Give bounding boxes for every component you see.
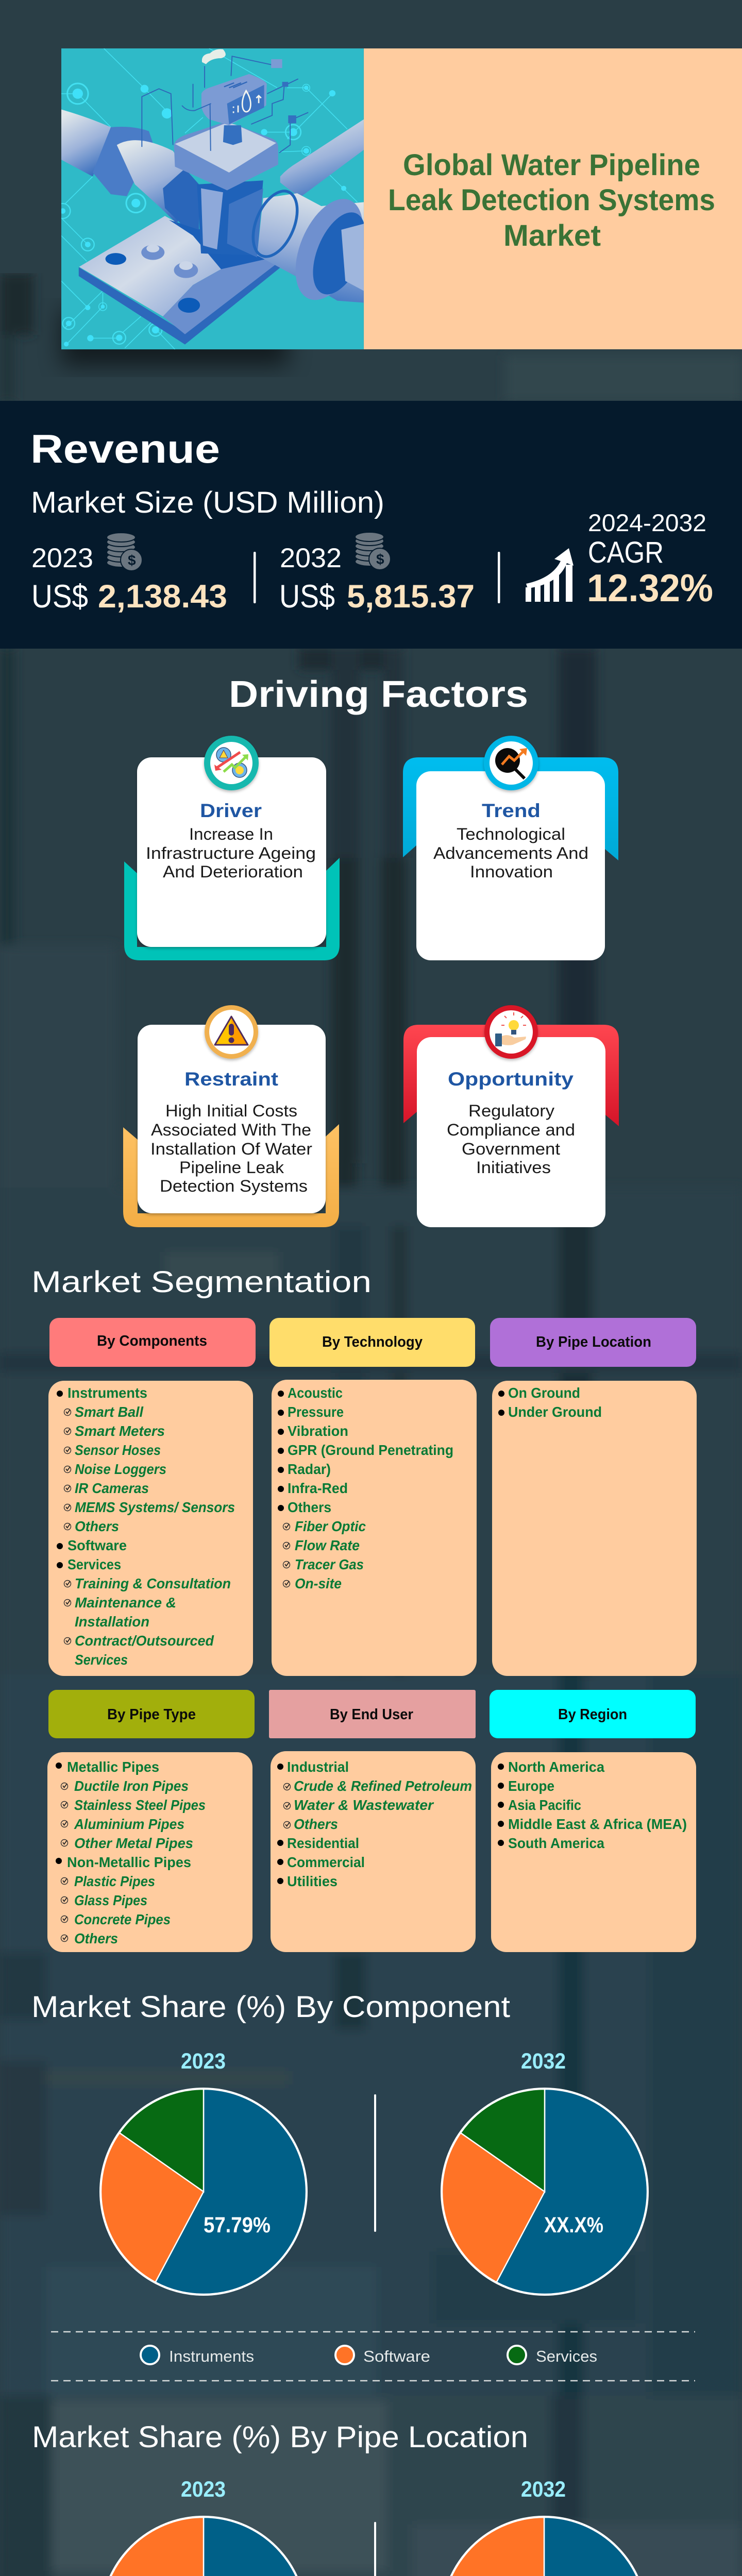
2032 revenue: US$ xyxy=(279,579,335,615)
2023 revenue: US$ xyxy=(31,579,88,615)
icon: coins 2032: $ xyxy=(376,551,384,567)
opportunity text xyxy=(447,1101,575,1177)
icon: coins 2032 xyxy=(355,532,391,570)
panel: restraint xyxy=(123,1005,339,1227)
CAGR: 12.32% xyxy=(587,566,713,609)
segment header: by components xyxy=(49,1318,256,1367)
title text: Leak Detection Systems xyxy=(388,183,715,217)
segment header: by pipe type xyxy=(48,1690,255,1738)
panel: components list: Services xyxy=(75,1652,128,1668)
panel: pipe type list: Ductile Iron Pipes xyxy=(74,1778,189,1794)
panel: components list: Services xyxy=(68,1556,121,1572)
segment header: by technology: By Technology xyxy=(322,1334,423,1350)
panel: technology list: Tracer Gas xyxy=(295,1556,364,1572)
pie chart: component 2023 xyxy=(101,2049,306,2294)
icon: driver xyxy=(204,736,259,790)
panel: pipe type list: Others xyxy=(74,1930,118,1946)
panel: pipe type list: Stainless Steel Pipes xyxy=(74,1797,206,1813)
panel: trend xyxy=(403,736,618,960)
CAGR xyxy=(587,509,713,609)
panel: components list: Maintenance & xyxy=(75,1595,176,1611)
opportunity title: Opportunity xyxy=(448,1069,574,1090)
panel: pipe location list xyxy=(492,1381,697,1676)
legend: component: Services xyxy=(536,2347,597,2365)
driver text xyxy=(146,825,316,881)
trend text: Innovation xyxy=(470,862,553,881)
panel: pipe location list: On Ground xyxy=(508,1385,580,1401)
divider xyxy=(254,552,256,603)
panel: components list: Software xyxy=(68,1537,127,1553)
pie chart: component 2023: 57.79% xyxy=(204,2213,271,2238)
heading: market share by component: Market Share (%) By Component xyxy=(31,1990,510,2024)
2023 revenue xyxy=(31,543,227,615)
title panel xyxy=(364,48,742,349)
panel: end user list: Crude & Refined Petroleum xyxy=(294,1778,472,1794)
panel: opportunity xyxy=(403,1005,619,1227)
segment header: by end user: By End User xyxy=(330,1706,413,1723)
panel: pipe type list: Concrete Pipes xyxy=(74,1911,171,1927)
illustration: water pipeline with leak sensor xyxy=(55,48,377,349)
market size subheading: Market Size (USD Million) xyxy=(31,486,384,519)
panel: pipe location list: Under Ground xyxy=(508,1404,602,1420)
panel: pipe type list: Glass Pipes xyxy=(74,1892,147,1908)
trend text xyxy=(433,825,588,881)
panel: pipe type list: Plastic Pipes xyxy=(74,1873,155,1889)
panel: technology list: GPR (Ground Penetrating xyxy=(288,1442,453,1458)
panel: pipe type list: Other Metal Pipes xyxy=(74,1835,193,1851)
panel: components list xyxy=(48,1381,253,1676)
pie chart: component 2023: 2023 xyxy=(181,2049,226,2074)
panel: pipe type list: Metallic Pipes xyxy=(67,1759,159,1775)
segment header: by technology xyxy=(269,1318,475,1367)
panel: components list: MEMS Systems/ Sensors xyxy=(75,1499,235,1515)
panel: components list: Noise Loggers xyxy=(75,1461,166,1477)
icon: trend xyxy=(484,736,538,790)
opportunity text: Government xyxy=(462,1140,560,1158)
CAGR: CAGR xyxy=(588,536,664,569)
revenue heading: Revenue xyxy=(30,426,220,471)
driver title: Driver xyxy=(200,800,262,821)
restraint title: Restraint xyxy=(184,1069,278,1090)
segment header: by pipe type: By Pipe Type xyxy=(107,1706,196,1723)
CAGR: 2024-2032 xyxy=(588,509,706,536)
icon: opportunity xyxy=(484,1005,538,1059)
opportunity text: Initiatives xyxy=(476,1158,551,1177)
panel: end user list: Industrial xyxy=(287,1759,349,1775)
panel: end user list: Water & Wastewater xyxy=(294,1797,434,1813)
panel: end user list: Residential xyxy=(287,1835,359,1851)
panel: components list: Instruments xyxy=(68,1385,147,1401)
restraint text: Installation Of Water xyxy=(150,1140,312,1158)
divider xyxy=(374,2094,376,2232)
segment header: by region xyxy=(490,1690,696,1738)
divider xyxy=(374,2522,376,2576)
panel: end user list: Utilities xyxy=(287,1873,338,1889)
legend: component: Instruments xyxy=(169,2347,254,2365)
segment header: by pipe location: By Pipe Location xyxy=(536,1334,651,1350)
driving factors heading: Driving Factors xyxy=(229,674,528,715)
panel: technology list: Acoustic xyxy=(288,1385,343,1401)
panel: region list: North America xyxy=(508,1759,604,1775)
restraint text: Detection Systems xyxy=(160,1177,308,1195)
restraint text: Pipeline Leak xyxy=(179,1158,284,1177)
pie chart: component 2032: XX.X% xyxy=(544,2213,603,2238)
2032 revenue: 2032 xyxy=(280,543,342,573)
heading: market share by pipe location: Market Share (%) By Pipe Location xyxy=(32,2420,528,2454)
trend text: Advancements And xyxy=(433,844,588,862)
panel: region list: Middle East & Africa (MEA) xyxy=(508,1816,687,1832)
restraint text: High Initial Costs xyxy=(165,1101,297,1120)
opportunity text: Compliance and xyxy=(447,1121,575,1139)
panel: components list: Smart Ball xyxy=(75,1404,144,1420)
2032 revenue: 5,815.37 xyxy=(347,579,475,615)
panel: components list: Sensor Hoses xyxy=(75,1442,161,1458)
panel: region list xyxy=(491,1752,696,1952)
panel: driver xyxy=(124,736,340,960)
2023 revenue: 2023 xyxy=(31,543,93,573)
title text xyxy=(388,148,715,252)
panel: technology list: Others xyxy=(288,1499,331,1515)
panel: technology list: Fiber Optic xyxy=(295,1518,366,1534)
panel: region list: South America xyxy=(508,1835,604,1851)
panel: technology list: On-site xyxy=(295,1575,342,1591)
header banner xyxy=(55,48,742,349)
driver text: Infrastructure Ageing xyxy=(146,844,316,862)
divider xyxy=(498,552,500,603)
2032 revenue xyxy=(279,543,475,615)
segment header: by components: By Components xyxy=(97,1333,207,1349)
panel: technology list xyxy=(272,1380,477,1676)
title text: Market xyxy=(503,219,601,252)
panel: pipe type list xyxy=(47,1752,252,1952)
legend: component xyxy=(141,2346,597,2365)
legend: component: Software xyxy=(363,2347,430,2365)
panel: technology list: Infra-Red xyxy=(288,1480,348,1496)
segment header: by region: By Region xyxy=(558,1706,627,1723)
panel: components list: Contract/Outsourced xyxy=(75,1633,214,1649)
panel: technology list: Radar) xyxy=(288,1461,331,1477)
panel: components list: Others xyxy=(75,1518,119,1534)
panel: pipe type list: Aluminium Pipes xyxy=(74,1816,184,1832)
panel: end user list xyxy=(271,1751,476,1952)
driver text: Increase In xyxy=(189,825,273,843)
panel: components list: IR Cameras xyxy=(75,1480,149,1496)
icon: coins 2023 xyxy=(107,533,142,571)
panel: technology list: Pressure xyxy=(288,1404,344,1420)
segment header: by pipe location xyxy=(490,1318,696,1367)
panel: components list: Training & Consultation xyxy=(75,1575,231,1591)
icon: coins 2023: $ xyxy=(128,552,136,568)
panel: end user list: Commercial xyxy=(287,1854,365,1870)
restraint text xyxy=(150,1101,312,1195)
panel: components list: Smart Meters xyxy=(75,1423,165,1439)
icon: restraint xyxy=(205,1005,258,1059)
2023 revenue: 2,138.43 xyxy=(98,579,227,615)
pie chart: pipe location 2023 xyxy=(102,2477,306,2576)
pie chart: component 2032 xyxy=(442,2049,647,2294)
opportunity text: Regulatory xyxy=(468,1101,554,1120)
title text: Global Water Pipeline xyxy=(403,148,700,182)
panel: end user list: Others xyxy=(294,1816,338,1832)
market segmentation heading: Market Segmentation xyxy=(31,1265,372,1299)
pie chart: pipe location 2032: 2032 xyxy=(521,2477,566,2502)
pie chart: pipe location 2023: 2023 xyxy=(181,2477,226,2502)
trend title: Trend xyxy=(482,800,541,821)
pie chart: pipe location 2032 xyxy=(442,2477,646,2576)
panel: technology list: Flow Rate xyxy=(295,1537,360,1553)
icon: growth chart arrow xyxy=(526,548,574,602)
restraint text: Associated With The xyxy=(151,1121,311,1139)
panel: technology list: Vibration xyxy=(288,1423,348,1439)
panel: region list: Europe xyxy=(508,1778,554,1794)
trend text: Technological xyxy=(457,825,565,843)
pie chart: component 2032: 2032 xyxy=(521,2049,566,2074)
panel: pipe type list: Non-Metallic Pipes xyxy=(67,1854,191,1870)
revenue band xyxy=(0,401,742,649)
panel: components list: Installation xyxy=(75,1614,149,1630)
driver text: And Deterioration xyxy=(163,862,303,881)
panel: region list: Asia Pacific xyxy=(508,1797,581,1813)
segment header: by end user xyxy=(269,1690,476,1738)
